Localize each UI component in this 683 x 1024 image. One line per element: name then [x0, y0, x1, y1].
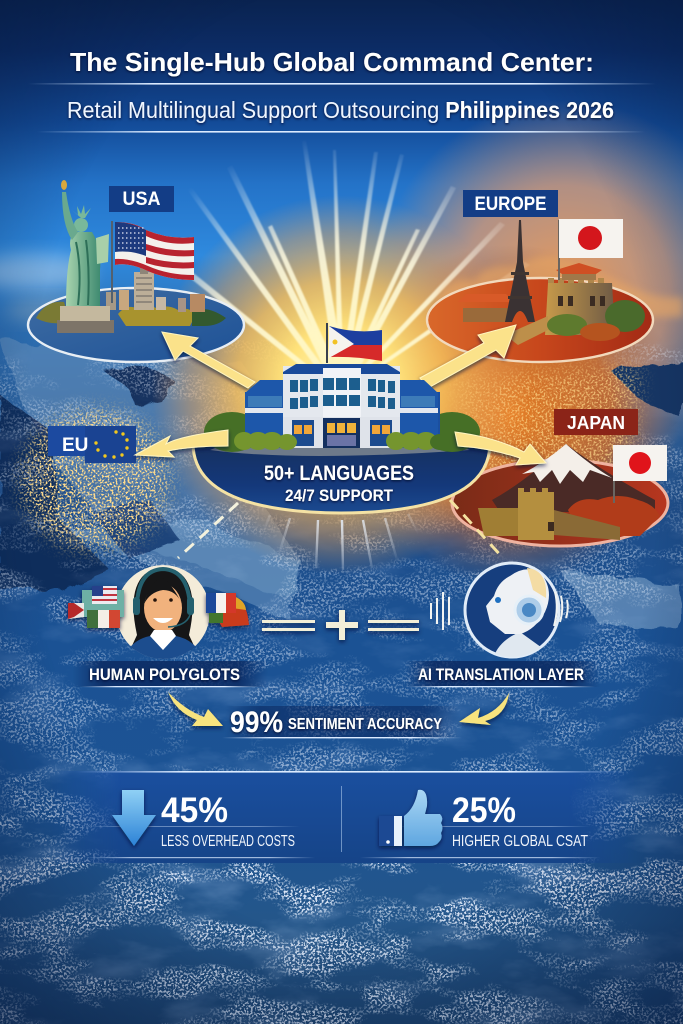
metric: sentiment accuracy	[222, 706, 462, 739]
label: human polyglots: HUMAN POLYGLOTS	[89, 665, 240, 684]
icon: Eiffel Tower	[505, 220, 535, 322]
value: 25%: 25%	[452, 791, 516, 830]
value: 99%: 99%	[230, 706, 283, 739]
icon: Mount Fuji	[492, 444, 655, 512]
icon: agent avatar	[116, 565, 210, 660]
icon: thumbs up	[379, 790, 442, 846]
skyline	[106, 268, 205, 312]
dashed connector right	[450, 500, 503, 558]
flags left	[68, 586, 124, 628]
label: Japan	[554, 409, 638, 435]
label: AI translation layer: AI TRANSLATION LAYER	[418, 665, 584, 684]
label: human polyglots	[73, 661, 268, 687]
central glow behind hub	[151, 195, 531, 575]
island: Japan	[452, 460, 668, 546]
icon: sound waves	[431, 592, 568, 630]
arrow: AI to accuracy	[459, 693, 509, 725]
icon: Japan flag lower	[613, 445, 667, 503]
icon: USA flag	[111, 221, 194, 303]
icon: Statue of Liberty	[57, 180, 114, 333]
hub text: languages: 50+ LANGUAGES	[264, 462, 414, 485]
arrow: hub to EU	[135, 430, 228, 457]
icon: Japan flag	[558, 219, 623, 280]
light rays from hub	[160, 140, 530, 380]
land masses	[0, 340, 680, 630]
caption: less overhead costs: LESS OVERHEAD COSTS	[161, 833, 295, 850]
caption: higher global csat: HIGHER GLOBAL CSAT	[452, 833, 588, 850]
arrow: hub to Europe	[420, 325, 516, 388]
foliage	[547, 300, 645, 341]
subtitle: Retail Multilingual Support Outsourcing Philippines 2026	[67, 97, 614, 123]
label: AI translation layer	[405, 661, 600, 687]
icon: Great Wall tower	[505, 263, 615, 345]
icon: down arrow	[112, 790, 156, 846]
label: Europe: EUROPE	[474, 194, 546, 215]
title divider	[28, 83, 656, 85]
caption: sentiment accuracy: SENTIMENT ACCURACY	[288, 716, 442, 733]
value: 45%: 45%	[161, 791, 228, 830]
temple	[458, 294, 514, 322]
label: EU with flag	[48, 426, 136, 463]
label: USA: USA	[122, 189, 161, 210]
panel: Europe region	[427, 190, 683, 362]
icon: AI robot head	[465, 563, 559, 662]
panel: results	[50, 771, 640, 863]
icon: headquarters building	[245, 364, 440, 448]
clouds: sunset	[440, 256, 683, 317]
arrow: human to accuracy	[168, 692, 223, 726]
arrow: hub to USA	[162, 332, 255, 388]
icon: Great Wall	[478, 488, 620, 540]
green hedges behind	[204, 412, 480, 452]
hub platform	[193, 443, 490, 513]
flags right	[206, 593, 249, 627]
title: The Single-Hub Global Command Center:	[70, 47, 594, 77]
label: Japan: JAPAN	[567, 413, 625, 433]
arrow: hub to Japan	[455, 432, 546, 465]
panel: central hub	[193, 323, 490, 513]
panel: USA region	[28, 180, 244, 362]
dashed connector left	[178, 503, 238, 558]
island: USA	[28, 288, 244, 362]
shrubs	[234, 432, 450, 450]
panel: Japan region	[452, 409, 668, 546]
hub text: support: 24/7 SUPPORT	[285, 486, 394, 505]
headset	[133, 569, 194, 627]
subtitle divider	[37, 131, 645, 133]
label: USA	[109, 186, 174, 212]
equals-plus-equals connector	[262, 610, 419, 640]
label: Europe	[463, 190, 558, 217]
rays below hub	[228, 510, 458, 570]
panel: AI translation	[405, 563, 600, 687]
panel: human polyglots	[68, 565, 268, 687]
foliage: autumn	[568, 496, 660, 536]
label: EU with flag: EU	[62, 435, 88, 456]
icon: Philippine flag	[326, 323, 382, 363]
island: Europe	[427, 278, 653, 362]
